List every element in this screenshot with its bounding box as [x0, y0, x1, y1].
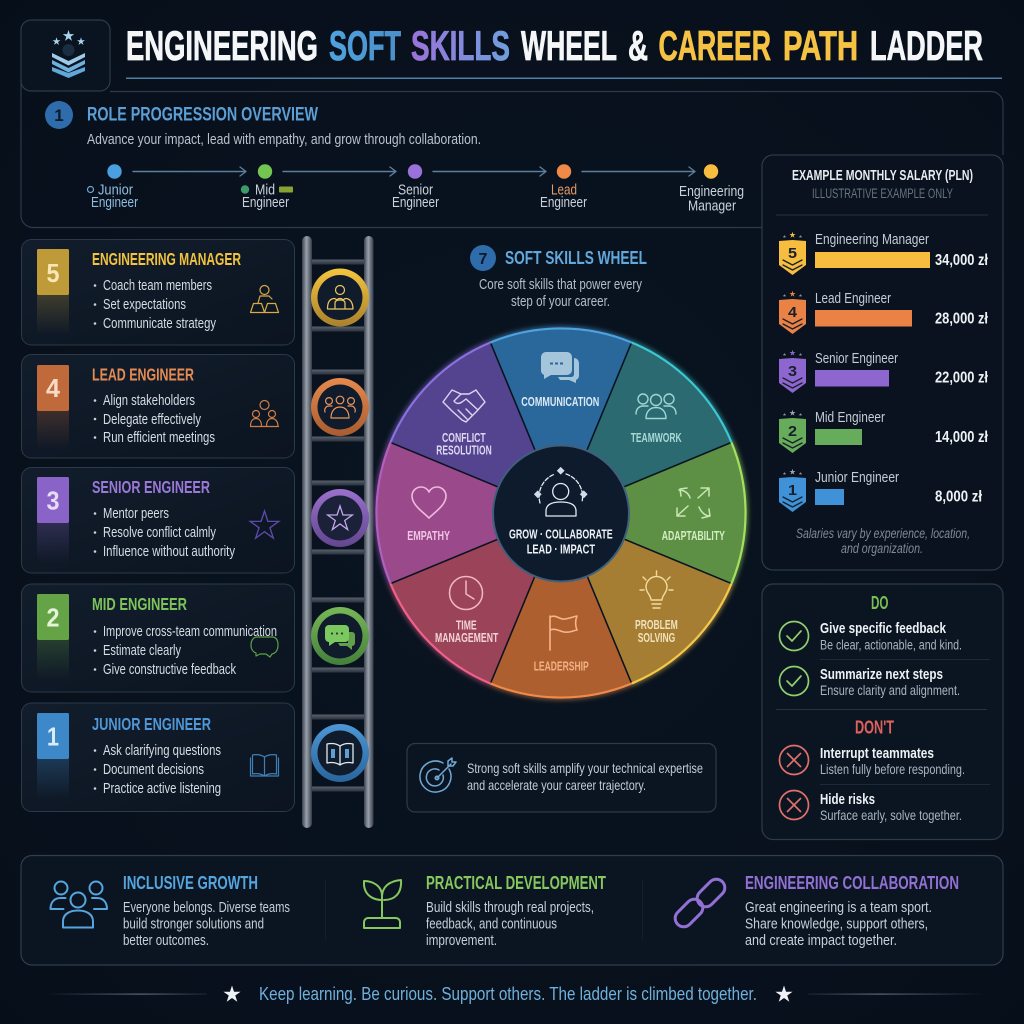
wheel hub: GROW · COLLABORATE: [509, 528, 613, 542]
value: engineering collaboration: and create impact together.: [745, 933, 897, 949]
rank tile 4: 4: [46, 373, 61, 403]
panel: lead engineer card: [22, 354, 294, 458]
do item: next steps: [780, 666, 960, 698]
card bullets: Mentor peers: [103, 506, 169, 522]
don't item: interrupt: Listen fully before responding.: [820, 761, 965, 777]
do item: specific feedback: [780, 620, 962, 652]
sector: conflict resolution: [390, 342, 561, 513]
callout: soft skills amplify: Strong soft skills amplify your technical expertise: [467, 760, 703, 776]
salary row: mid engineer: 2: [788, 423, 797, 440]
value: practical development: improvement.: [426, 933, 497, 949]
card bullets: [94, 743, 221, 797]
icon: target: [420, 758, 456, 792]
value: inclusive growth: Everyone belongs. Diverse teams: [123, 900, 290, 916]
card bullets: [94, 506, 236, 560]
sector: leadership: [490, 513, 632, 698]
salary row: engineering manager: Engineering Manager: [815, 232, 929, 248]
callout: soft skills amplify: [407, 744, 716, 812]
value: inclusive growth: [50, 872, 290, 949]
card bullets: Resolve conflict calmly: [103, 525, 217, 541]
value: inclusive growth: better outcomes.: [123, 933, 209, 949]
panel: ladder rails and rungs: [302, 236, 374, 828]
rank tile 1: [37, 713, 69, 799]
salary row: senior engineer: [779, 350, 989, 393]
icon: team lead: [250, 286, 278, 312]
progression track: Manager: [688, 198, 736, 214]
sector: empathy: EMPATHY: [407, 529, 450, 543]
do item: next steps: Summarize next steps: [820, 666, 943, 683]
rank tile 2: 2: [46, 602, 60, 632]
title: SOFT: [329, 22, 401, 69]
do item: specific feedback: Be clear, actionable, and kind.: [820, 636, 962, 652]
icon: open book: [250, 755, 278, 776]
card bullets: Document decisions: [103, 762, 204, 778]
panel: values strip: [21, 856, 1003, 965]
ladder medallion 1: [311, 724, 369, 782]
header emblem: [21, 20, 110, 91]
salary row: engineering manager: 34,000 zł: [935, 252, 989, 269]
panel: do and don't: [762, 584, 1003, 840]
progression track: Junior: [98, 182, 133, 198]
don't item: hide risks: [780, 790, 962, 823]
sector: conflict resolution: RESOLUTION: [436, 443, 492, 457]
rank tile 1: 1: [47, 722, 59, 752]
salary row: lead engineer: [779, 291, 989, 334]
value: practical development: Build skills through real projects,: [426, 900, 594, 916]
progression track: Lead: [551, 182, 577, 198]
overview heading: ROLE PROGRESSION OVERVIEW: [87, 104, 318, 126]
card title: LEAD ENGINEER: [92, 364, 194, 384]
wheel hub: [493, 446, 629, 582]
section badge 1: [45, 101, 73, 129]
progression track: Engineer: [392, 194, 439, 211]
card bullets: Practice active listening: [103, 781, 221, 797]
sector: teamwork: TEAMWORK: [631, 431, 682, 445]
sector: adaptability: [561, 442, 746, 584]
salary row: senior engineer: 22,000 zł: [935, 370, 989, 386]
card bullets: [94, 278, 217, 332]
title: ENGINEERING: [126, 22, 318, 69]
title: &: [628, 22, 648, 69]
card bullets: Give constructive feedback: [103, 662, 237, 678]
rank tile 2: [37, 594, 69, 680]
title: CAREER: [658, 22, 771, 69]
value: engineering collaboration: Great engineering is a team sport.: [745, 900, 932, 916]
sector: time management: [390, 513, 561, 684]
ladder medallion 4: [311, 378, 369, 436]
salary row: lead engineer: Lead Engineer: [815, 291, 891, 307]
footer tagline: [45, 984, 985, 1004]
title: [126, 22, 983, 69]
card title: MID ENGINEER: [92, 594, 187, 614]
salary footnote: and organization.: [841, 541, 923, 556]
value: practical development: feedback, and continuous: [426, 916, 557, 932]
rank tile 3: [37, 477, 69, 563]
callout: soft skills amplify: and accelerate your career trajectory.: [467, 777, 646, 793]
wheel hub: LEAD · IMPACT: [527, 542, 595, 556]
sector: communication: COMMUNICATION: [521, 395, 599, 409]
rank tile 4: [37, 365, 69, 449]
progression track: Engineer: [242, 194, 289, 211]
sector: empathy: [376, 442, 561, 584]
card bullets: Estimate clearly: [103, 643, 182, 659]
wheel rim: [376, 328, 746, 698]
rank tile 5: [37, 249, 69, 335]
value: inclusive growth: build stronger solutions and: [123, 916, 264, 932]
card bullets: Improve cross-team communication: [103, 624, 277, 640]
panel: example monthly salary: [762, 155, 1003, 570]
do item: next steps: Ensure clarity and alignment.: [820, 682, 960, 698]
value: inclusive growth: INCLUSIVE GROWTH: [123, 872, 258, 893]
card bullets: Set expectations: [103, 297, 186, 313]
icon: star: [250, 511, 279, 538]
footer tagline: Keep learning. Be curious. Support others. The ladder is climbed together.: [259, 984, 757, 1004]
value: practical development: PRACTICAL DEVELOPMENT: [426, 872, 606, 893]
do item: specific feedback: Give specific feedback: [820, 620, 947, 637]
title: WHEEL: [521, 22, 617, 69]
section badge 1: 1: [54, 106, 64, 125]
ladder medallion 3: [311, 489, 369, 547]
card bullets: Communicate strategy: [103, 316, 217, 332]
progression track: [88, 164, 744, 214]
salary row: lead engineer: 28,000 zł: [935, 310, 989, 328]
salary row: mid engineer: Mid Engineer: [815, 410, 885, 426]
wheel heading: SOFT SKILLS WHEEL: [505, 248, 647, 268]
value: practical development: [364, 872, 606, 949]
wheel glow: [376, 328, 746, 698]
salary footnote: Salaries vary by experience, location,: [796, 526, 970, 541]
card title: ENGINEERING MANAGER: [92, 249, 241, 269]
salary footnote: [796, 526, 970, 556]
card bullets: Ask clarifying questions: [103, 743, 221, 759]
rank tile 3: 3: [46, 486, 60, 516]
icon: group: [250, 400, 278, 426]
card bullets: Align stakeholders: [103, 393, 195, 409]
sector: communication: [490, 328, 632, 513]
ladder medallion 5: [311, 268, 369, 326]
card bullets: [94, 393, 215, 446]
salary note: ILLUSTRATIVE EXAMPLE ONLY: [812, 185, 953, 201]
salary row: engineering manager: 5: [788, 245, 797, 262]
salary row: junior engineer: 8,000 zł: [935, 488, 983, 506]
don't item: hide risks: Hide risks: [820, 791, 875, 808]
card bullets: Influence without authority: [103, 544, 236, 560]
title: PATH: [783, 22, 858, 69]
progression track: Senior: [398, 182, 433, 198]
sector: adaptability: ADAPTABILITY: [662, 529, 725, 543]
panel: engineering manager card: [22, 240, 294, 345]
panel: mid engineer card: [22, 584, 294, 692]
panel: junior engineer card: [22, 703, 294, 812]
salary row: junior engineer: [779, 469, 983, 512]
salary row: senior engineer: 3: [788, 363, 797, 380]
progression track: Mid: [255, 182, 275, 198]
card title: SENIOR ENGINEER: [92, 477, 210, 497]
don't item: hide risks: Surface early, solve together.: [820, 807, 962, 823]
wheel subtitle: step of your career.: [511, 294, 610, 310]
sector: leadership: LEADERSHIP: [534, 660, 589, 674]
wheel heading: [470, 245, 647, 271]
salary row: mid engineer: 14,000 zł: [935, 429, 989, 446]
progression track: Engineer: [540, 194, 587, 211]
value: engineering collaboration: Share knowledge, support others,: [745, 916, 928, 932]
don't item: interrupt: [780, 745, 965, 777]
salary row: junior engineer: Junior Engineer: [815, 470, 899, 486]
sector: time management: MANAGEMENT: [435, 631, 499, 645]
card bullets: Run efficient meetings: [103, 430, 215, 446]
value: engineering collaboration: [672, 872, 959, 949]
sector: problem solving: SOLVING: [638, 631, 675, 645]
sector: teamwork: [561, 342, 732, 513]
card bullets: [94, 624, 277, 678]
ladder medallion 2: [311, 607, 369, 665]
progression track: Engineering: [679, 183, 744, 200]
overview subtitle: Advance your impact, lead with empathy, and grow through collaboration.: [87, 132, 481, 148]
progression track: Engineer: [91, 194, 138, 211]
sector: problem solving: PROBLEM: [635, 618, 678, 632]
card bullets: Delegate effectively: [103, 412, 202, 428]
icon: speech bubble: [251, 637, 278, 657]
salary row: engineering manager: [779, 232, 989, 275]
don't heading: DON'T: [855, 718, 894, 738]
wheel subtitle: [479, 277, 643, 310]
sector: conflict resolution: CONFLICT: [442, 431, 486, 445]
sector: time management: TIME: [456, 619, 477, 633]
soft skills wheel: [376, 328, 746, 698]
do heading: DO: [871, 593, 888, 613]
salary row: mid engineer: [779, 410, 989, 453]
don't item: interrupt: Interrupt teammates: [820, 745, 934, 762]
card bullets: Coach team members: [103, 278, 212, 294]
salary row: junior engineer: 1: [788, 482, 797, 499]
salary row: lead engineer: 4: [788, 304, 798, 321]
sector: problem solving: [561, 513, 732, 684]
salary row: senior engineer: Senior Engineer: [815, 351, 898, 367]
wheel heading: 7: [479, 251, 488, 268]
title: SKILLS: [411, 22, 510, 69]
panel: senior engineer card: [22, 468, 294, 573]
rank tile 5: 5: [46, 258, 60, 288]
panel: role progression overview: [21, 80, 1003, 228]
wheel subtitle: Core soft skills that power every: [479, 277, 643, 293]
card title: JUNIOR ENGINEER: [92, 714, 211, 734]
